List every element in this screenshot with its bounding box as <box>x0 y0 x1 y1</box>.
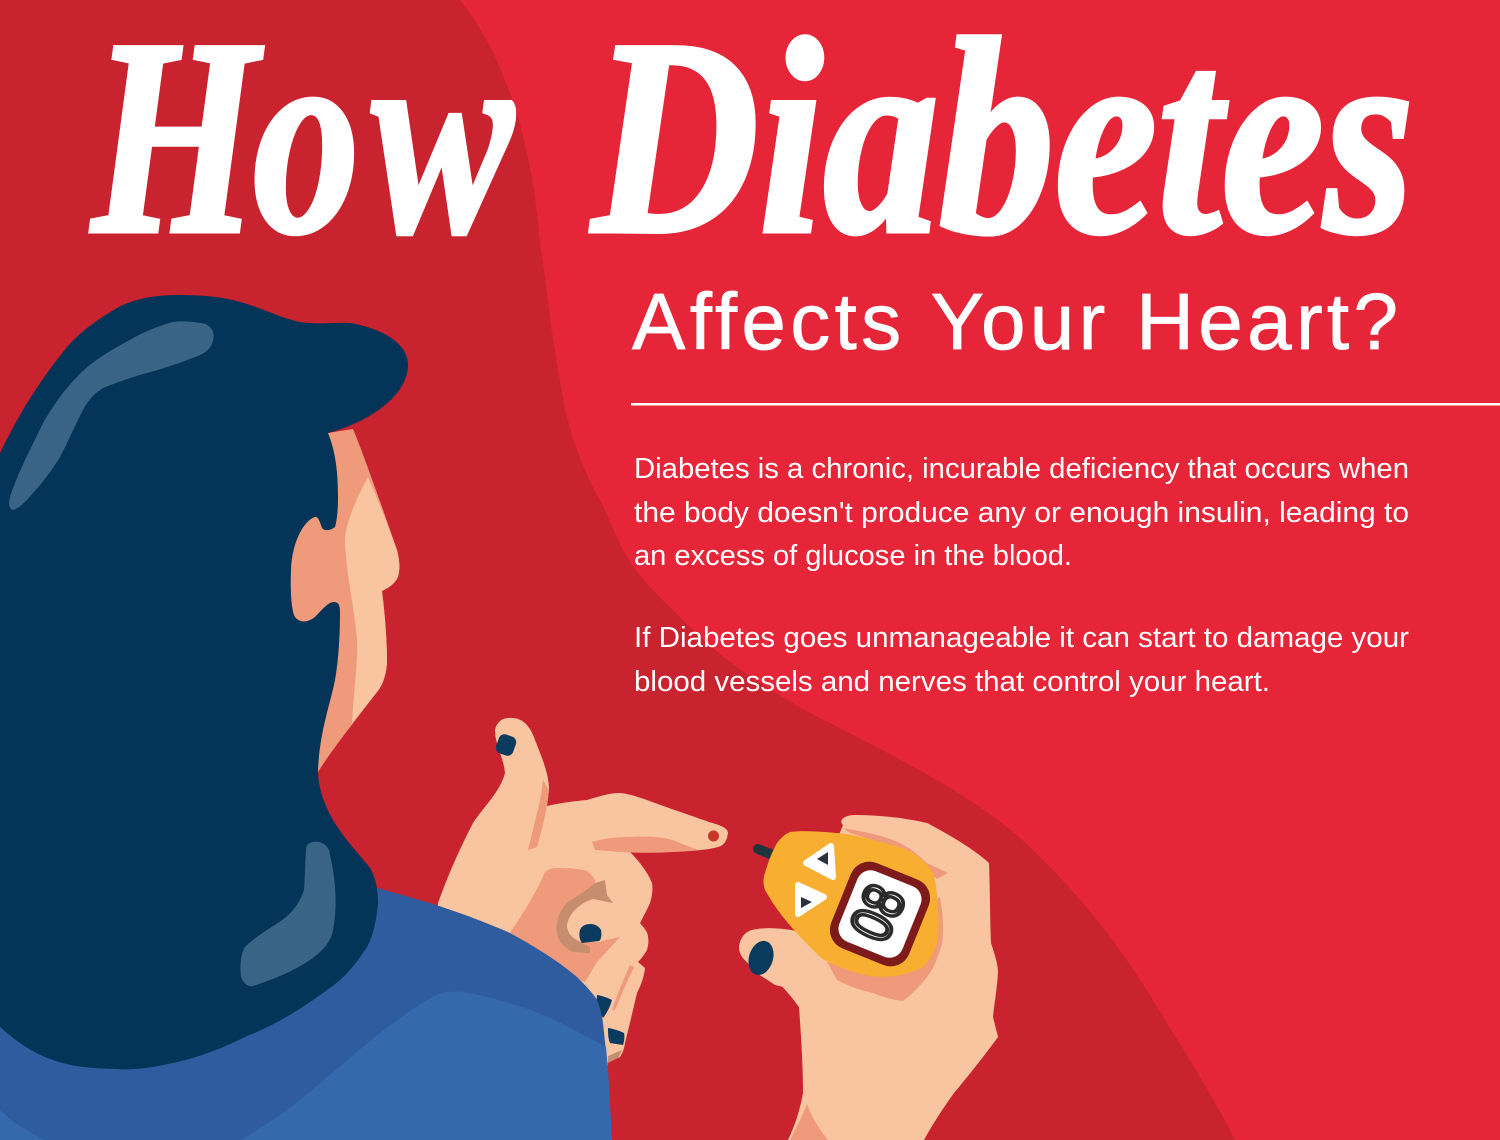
title: How Diabetes <box>90 0 1414 292</box>
second paragraph <box>634 622 1410 698</box>
down button <box>798 885 824 914</box>
blood drop <box>708 830 719 842</box>
intro paragraph: Diabetes is a chronic, incurable deficiency that occurs when <box>634 453 1409 485</box>
meter reading: 08 <box>837 875 919 951</box>
wrist shadow <box>790 1104 828 1140</box>
thumb nail <box>744 938 778 978</box>
face shadow side and ear <box>280 429 399 772</box>
lower finger separation <box>612 965 634 1010</box>
ring finger nail <box>608 1028 624 1045</box>
hair silhouette <box>0 295 408 1069</box>
shirt light corner <box>0 1110 45 1140</box>
index finger shadow <box>592 837 698 853</box>
holding hand <box>739 815 998 1140</box>
intro paragraph: the body doesn't produce any or enough insulin, leading to <box>634 497 1409 529</box>
second paragraph: If Diabetes goes unmanageable it can start to damage your <box>634 622 1410 654</box>
illustration: woman's face <box>280 429 399 772</box>
palm shadow <box>500 868 620 982</box>
shirt base <box>0 880 612 1140</box>
intro paragraph <box>634 453 1409 572</box>
thumb over meter <box>739 928 840 1000</box>
curled finger crease <box>556 880 613 953</box>
illustration: pointing hand with blood drop <box>430 718 728 1140</box>
shirt light area <box>241 992 612 1140</box>
intro paragraph: an excess of glucose in the blood. <box>634 540 1072 572</box>
lower hair highlight <box>240 842 336 986</box>
illustration: shirt <box>0 880 612 1140</box>
upper hair highlight <box>9 321 214 510</box>
meter probe <box>758 849 778 857</box>
middle finger nail <box>596 995 612 1018</box>
meter screen frame <box>824 856 936 972</box>
fingertip underside <box>608 1050 622 1063</box>
illustration: hair <box>0 295 408 1069</box>
face lit side <box>345 477 399 723</box>
thumb nail <box>494 733 518 757</box>
meter screen <box>834 866 926 962</box>
palm shadow under meter <box>827 897 943 1001</box>
up button <box>806 846 833 877</box>
curled finger nail <box>579 924 601 943</box>
thumb shadow <box>528 780 549 850</box>
subtitle: Affects Your Heart? <box>632 277 1398 366</box>
meter body <box>764 831 938 977</box>
divider line <box>631 403 1500 406</box>
hand base <box>430 718 728 1140</box>
shadow above meter <box>843 828 948 879</box>
illustration: hand holding glucose meter <box>739 815 998 1140</box>
second paragraph: blood vessels and nerves that control your heart. <box>634 666 1270 698</box>
